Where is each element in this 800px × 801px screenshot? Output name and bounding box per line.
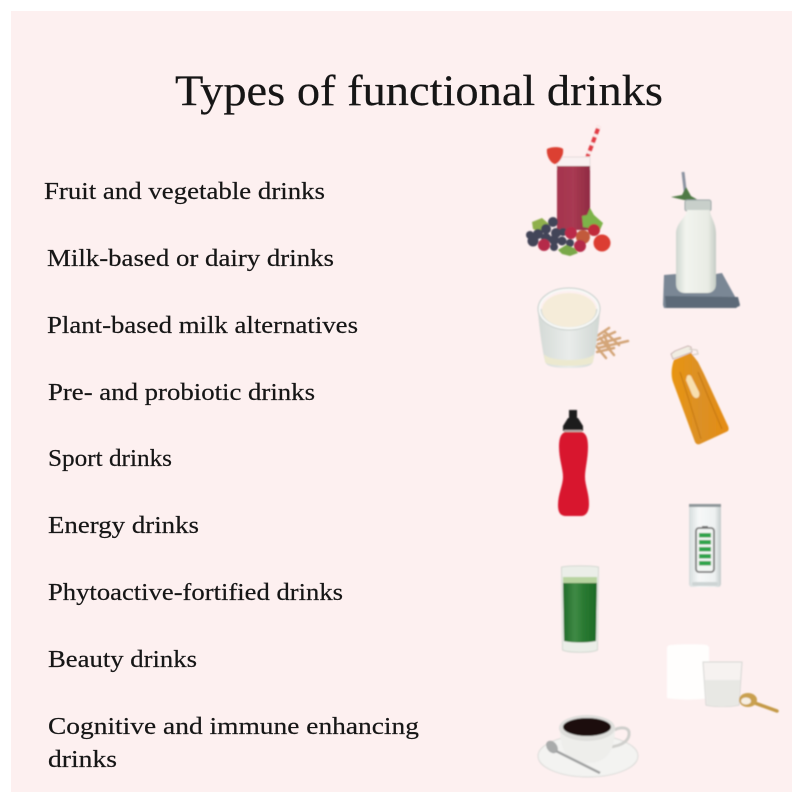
list item: cognitive and immune enhancing drinks: drinks [48, 747, 117, 773]
icon: red sport bottle [558, 410, 589, 516]
list item: energy drinks: Energy drinks [48, 513, 199, 539]
icon: berry smoothie [526, 126, 610, 256]
list item: cognitive and immune enhancing drinks [48, 714, 419, 773]
icon: cup of coffee on saucer [538, 715, 638, 777]
list item: beauty drinks: Beauty drinks [48, 647, 197, 673]
icon: orange juice bottle [671, 346, 729, 444]
title: Types of functional drinks [175, 68, 663, 115]
battery symbol [696, 526, 714, 572]
list of drink types [44, 179, 419, 773]
icon: milk bottle on napkin [663, 172, 740, 308]
list item: plant-based milk alternatives: Plant-based milk alternatives [47, 313, 358, 339]
list item: phytoactive-fortified drinks: Phytoactive-fortified drinks [48, 580, 343, 606]
list item: fruit and vegetable drinks: Fruit and vegetable drinks [44, 179, 325, 205]
icon: beauty powder jar, water glass and scoop [667, 644, 777, 711]
icon: energy drink can with battery [689, 504, 721, 587]
list item: cognitive and immune enhancing drinks: Cognitive and immune enhancing [48, 714, 419, 740]
icon: green phytoactive drink glass [562, 566, 598, 652]
list item: milk-based or dairy drinks: Milk-based or dairy drinks [47, 246, 334, 272]
list item: sport drinks: Sport drinks [48, 446, 172, 472]
list item: pre- and probiotic drinks: Pre- and probiotic drinks [48, 380, 315, 406]
icon: glass of plant milk with oats [538, 288, 628, 368]
